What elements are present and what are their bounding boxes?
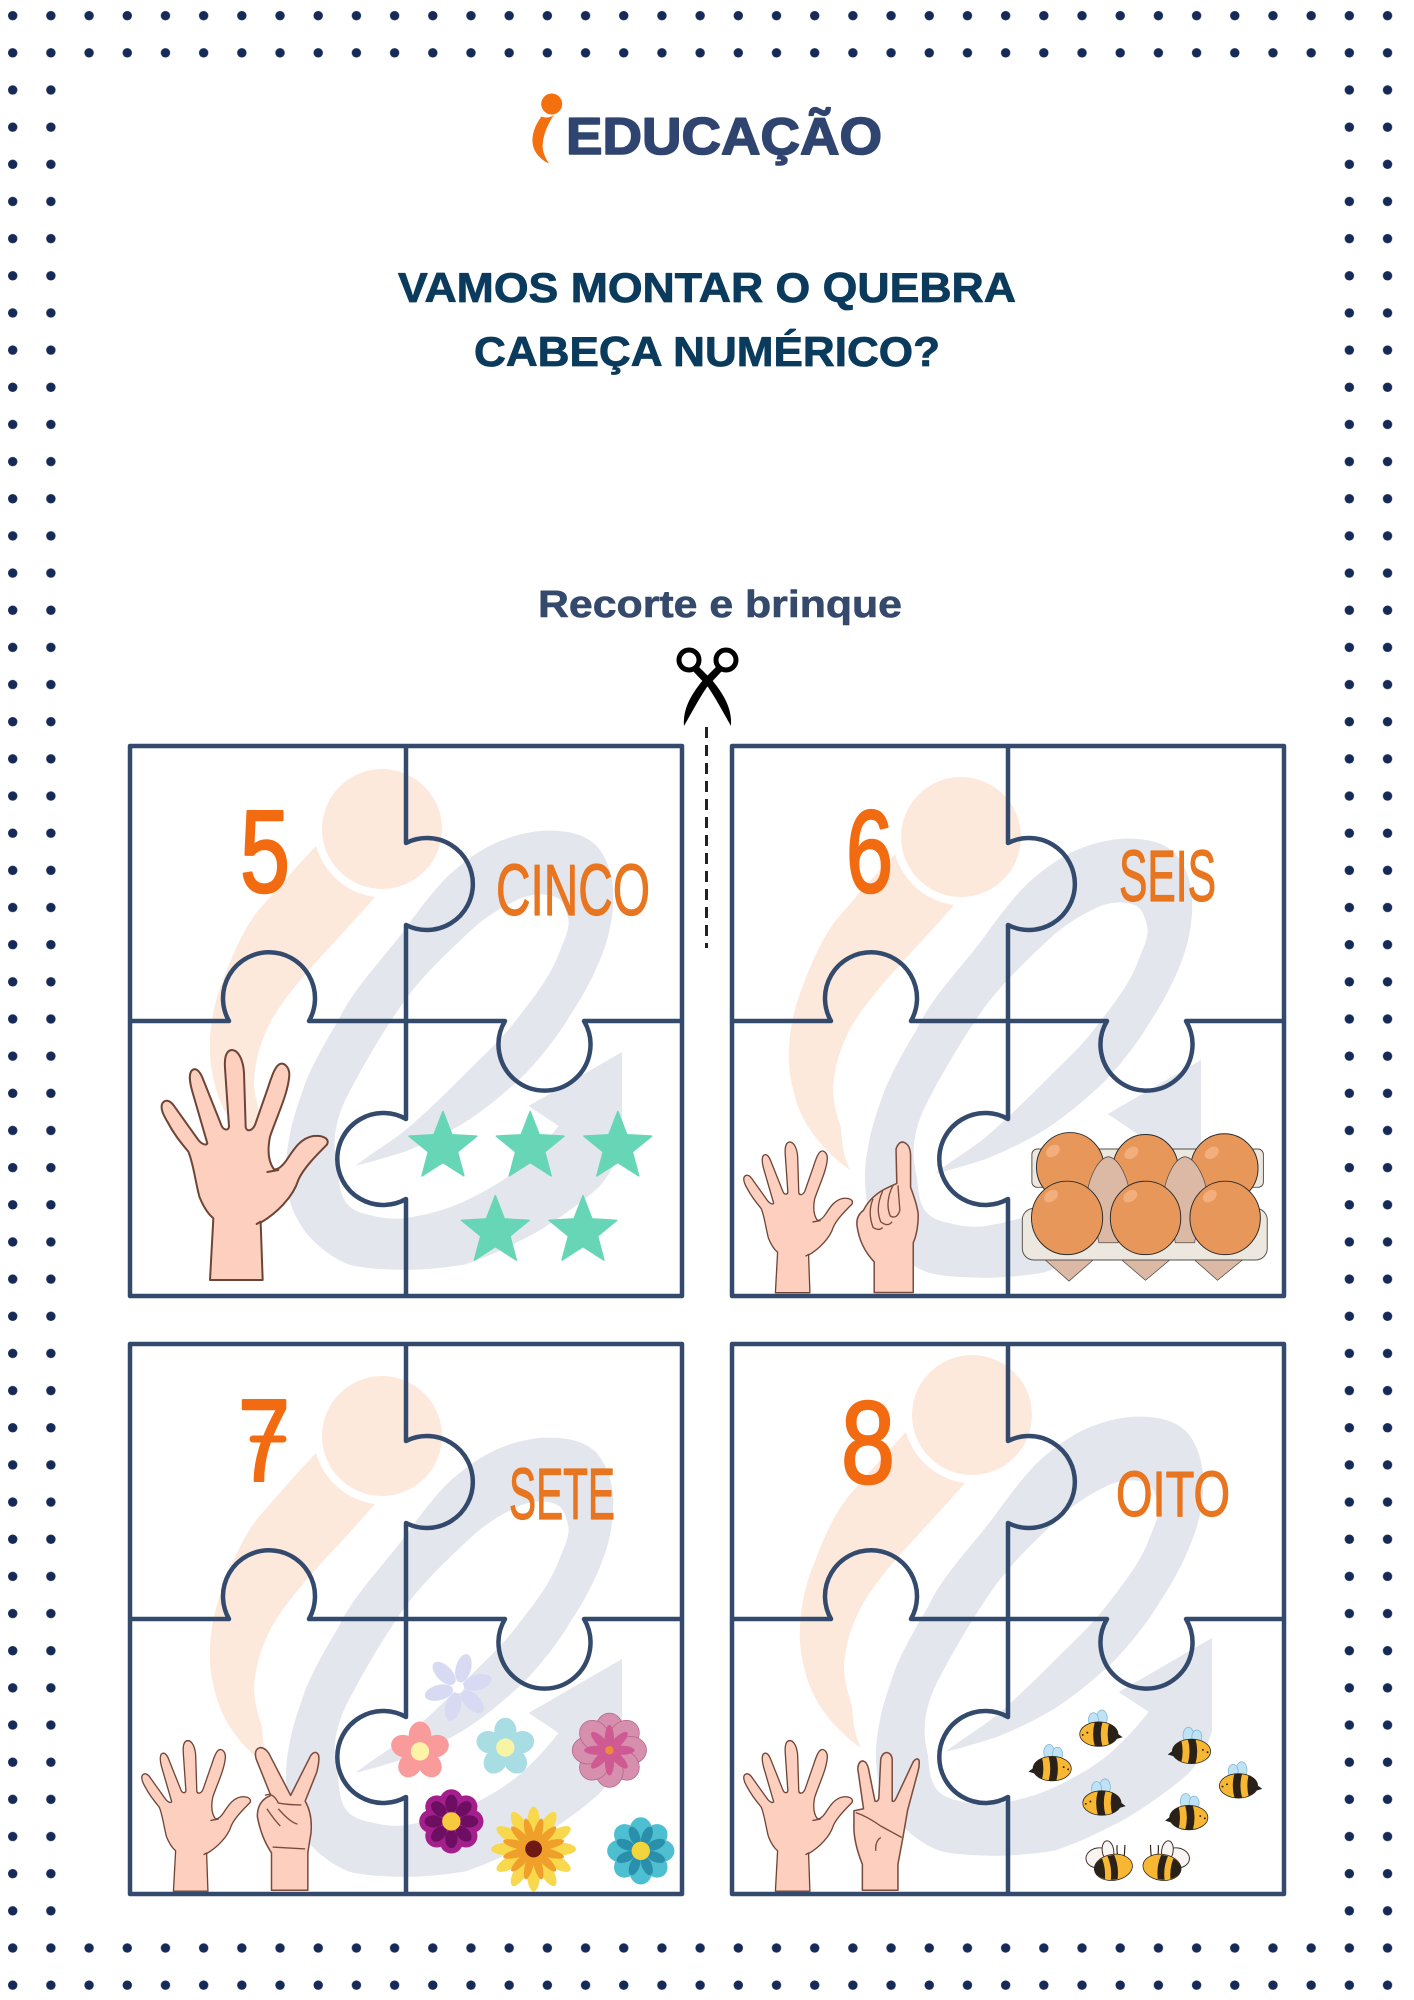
- number 5: 5: [240, 786, 290, 917]
- puzzle cut lines: [732, 746, 1284, 1296]
- number 7: 7: [238, 1375, 290, 1506]
- icon: hand five: [744, 1142, 852, 1293]
- background watermark: [210, 769, 622, 1270]
- word sete: SETE: [509, 1455, 615, 1535]
- number 6: 6: [846, 786, 893, 917]
- dashed cut line: [705, 727, 708, 948]
- number 8: 8: [841, 1377, 895, 1508]
- logo: iEducação: [532, 94, 882, 166]
- icon: hand four fingers: [854, 1753, 919, 1890]
- panel: puzzle 5: [130, 746, 682, 1296]
- title: [398, 264, 1016, 375]
- background watermark: [789, 777, 1201, 1278]
- logo wordmark: EDUCAÇÃO: [566, 107, 882, 166]
- title: VAMOS MONTAR O QUEBRA: [398, 264, 1016, 311]
- puzzle cut lines: [130, 746, 682, 1296]
- panel: puzzle 7: [130, 1344, 682, 1894]
- background watermark: [800, 1355, 1212, 1856]
- icon: hand five: [142, 1741, 251, 1891]
- icon: scissors: [679, 650, 736, 726]
- icon: seven flowers: [388, 1652, 674, 1891]
- icon: egg carton: [1022, 1133, 1267, 1281]
- word cinco: CINCO: [496, 851, 650, 931]
- subtitle: recorte e brinque: Recorte e brinque: [538, 584, 902, 626]
- word seis: SEIS: [1119, 837, 1216, 917]
- icon: hand two fingers: [255, 1748, 319, 1890]
- icon: orange i: [532, 94, 562, 164]
- word oito: OITO: [1116, 1458, 1230, 1530]
- puzzle cut lines: [130, 1344, 682, 1894]
- icon: hand one finger: [857, 1142, 918, 1293]
- icon: five stars: [409, 1112, 652, 1260]
- icon: hand five: [744, 1741, 852, 1891]
- panel: puzzle 8: [732, 1344, 1284, 1894]
- panel: puzzle 6: [732, 746, 1284, 1296]
- title: CABEÇA NUMÉRICO?: [474, 328, 940, 375]
- background watermark: [210, 1376, 622, 1877]
- puzzle cut lines: [732, 1344, 1284, 1894]
- icon: eight bees: [1028, 1710, 1262, 1886]
- icon: hand five: [162, 1050, 328, 1280]
